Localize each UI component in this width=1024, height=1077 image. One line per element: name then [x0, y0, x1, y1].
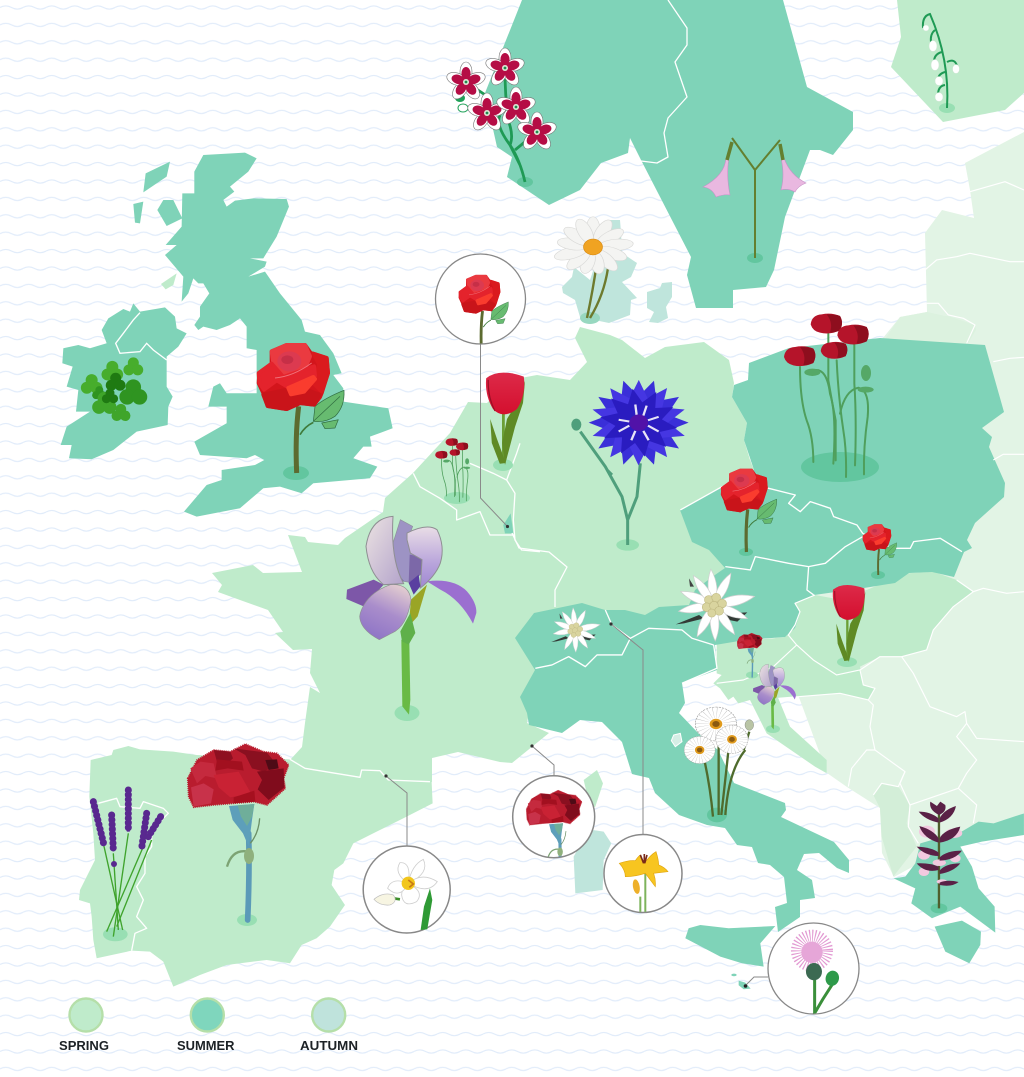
map: Denmark (autumn): [562, 220, 637, 323]
flower: carnation in Spain: [188, 744, 289, 926]
flower: tulip in the Netherlands: [486, 373, 525, 471]
callout: rose, Luxembourg: [436, 254, 526, 528]
legend: spring: SPRING: [59, 1039, 109, 1053]
map: eastern Europe, no data: [760, 132, 1024, 877]
legend: [59, 998, 358, 1053]
map: Spain and Portugal (spring): [79, 746, 433, 987]
callout: thistle, Malta: [744, 923, 859, 1015]
flower: saxifrage in Norway: [445, 48, 558, 187]
map: Sicily, Sardinia, Corsica, Greece, Crete and Malta: [574, 733, 1024, 989]
map: Lithuania tint: [883, 312, 976, 345]
map: Great Britain (summer): [133, 153, 393, 517]
map: Albania tint: [873, 783, 917, 877]
flower: daisy in Denmark: [552, 217, 634, 324]
callout: carnation, Monaco: [512, 744, 596, 858]
callout: lily, San Marino / Liechtenstein: [604, 622, 682, 913]
flower: rose in Czechia: [722, 470, 777, 556]
map: Hungary, Slovenia and Croatia (spring): [713, 572, 973, 773]
map: Finland (spring): [891, 0, 1024, 122]
flower: carnation in Slovenia: [737, 633, 762, 678]
flower: acanthus in Greece: [917, 802, 962, 913]
flower: iris in France: [346, 516, 476, 721]
flower: cornflower in Germany: [571, 371, 699, 551]
callout: narcissus, Andorra: [363, 774, 450, 933]
flower: shamrock in Ireland: [81, 357, 147, 421]
map: Norway and Sweden (summer): [485, 0, 853, 308]
map: Ireland (summer): [61, 303, 187, 459]
flower: rose in Slovakia: [863, 525, 897, 579]
legend: autumn: AUTUMN: [300, 1039, 358, 1053]
legend: summer: SUMMER: [177, 1039, 234, 1053]
map: Danish island (autumn): [647, 282, 672, 323]
flower: edelweiss in Austria: [676, 569, 756, 641]
flower: lavender in Portugal: [93, 790, 161, 941]
legend: spring: [59, 998, 109, 1053]
flower: rose in the United Kingdom: [259, 345, 344, 480]
flower: tulip in Hungary: [833, 585, 865, 667]
flower: poppies in Poland: [784, 314, 879, 482]
legend: autumn: [300, 998, 358, 1053]
flower: poppies in Belgium: [435, 438, 470, 504]
flower: twinflower in Sweden: [703, 138, 806, 263]
map: France, Benelux and Germany (spring): [212, 327, 760, 782]
flower: edelweiss in Switzerland: [551, 608, 601, 652]
flower: lily of the valley in Finland: [923, 14, 960, 113]
flower: daisies in Italy: [684, 707, 754, 822]
map: Poland, Czechia, Slovakia, Austria, Switzerland and Italy (summer): [515, 338, 1005, 932]
map: Luxembourg (summer): [503, 513, 513, 533]
flower: iris in Croatia: [753, 664, 796, 733]
legend: summer: [177, 998, 234, 1053]
